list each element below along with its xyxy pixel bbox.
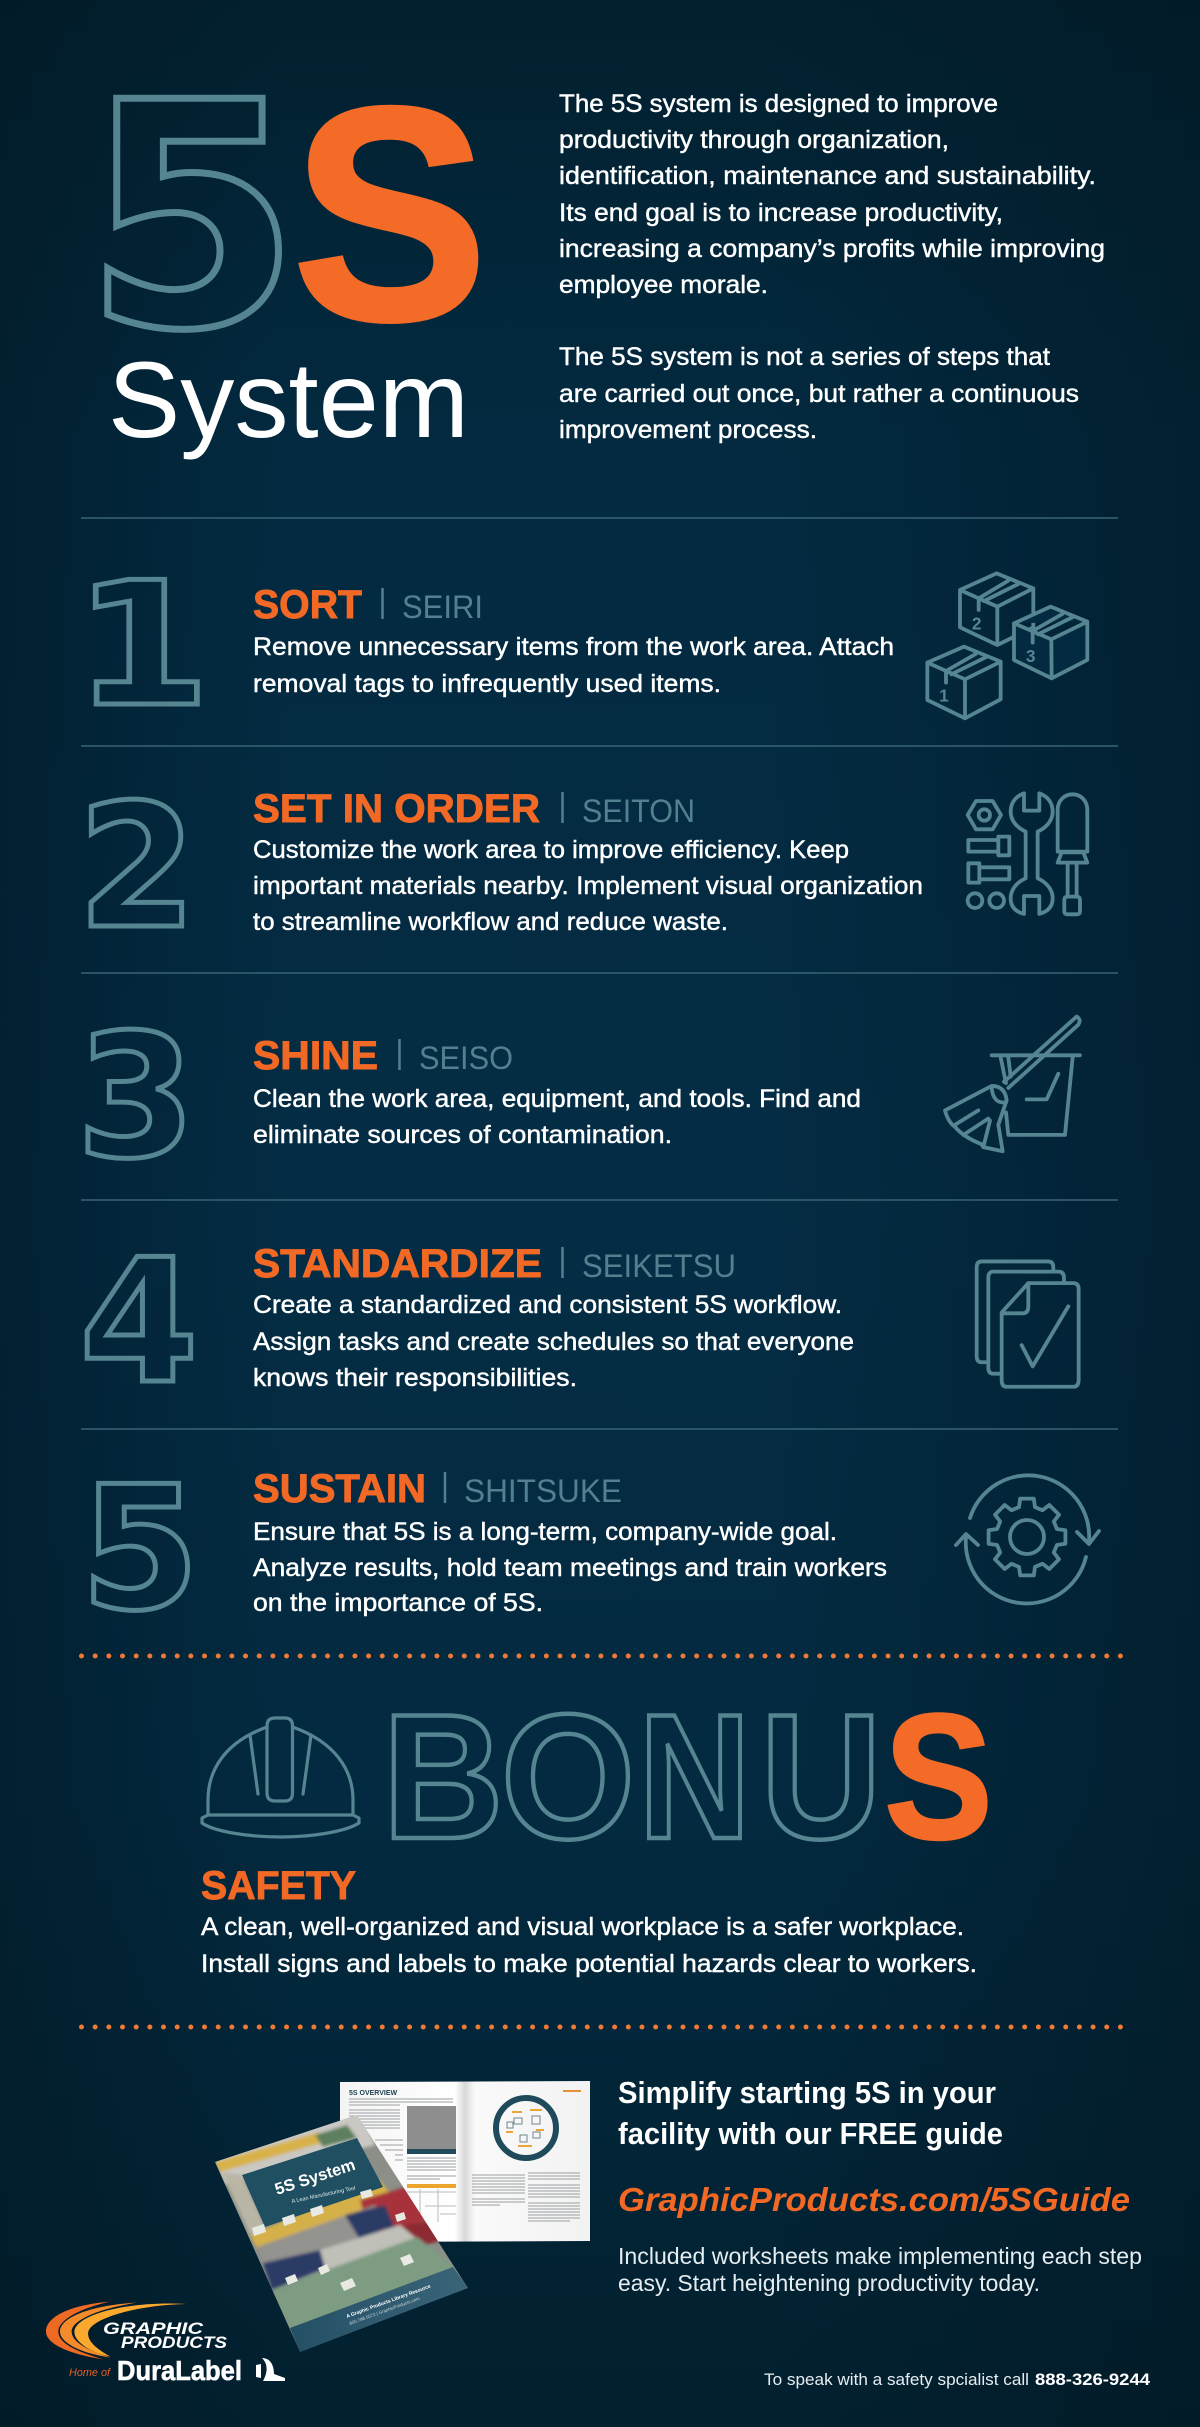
icon: broom and bucket [945,1017,1080,1151]
intro text block: Its end goal is to increase productivity, [559,199,1003,227]
outlined numeral 5: 5 [84,37,300,399]
heading: bonus: O [501,1678,635,1877]
panel: step 4 standardize [80,1223,1079,1422]
phone contact line: 888-326-9244 [1035,2371,1151,2389]
description: important materials nearby. Implement visual organization [253,872,923,900]
heading: sustain: SUSTAIN [253,1467,426,1511]
heading: shine: SEISO [419,1040,513,1076]
intro text block: are carried out once, but rather a continuous [559,380,1079,408]
icon: checklist documents [977,1261,1079,1387]
intro text block: improvement process. [559,416,817,444]
description: knows their responsibilities. [253,1364,577,1392]
numeral 1: 1 [74,546,210,745]
numeral 5: 5 [81,1450,199,1649]
logo: Graphic Products, Home of DuraLabel: DuraLabel [117,2355,242,2386]
intro text block: The 5S system is not a series of steps that [559,343,1050,371]
description [253,1085,861,1149]
guide url: GraphicProducts.com/5SGuide [618,2181,1130,2218]
numeral 2: 2 [78,768,196,967]
description: Clean the work area, equipment, and tools. Find and [253,1085,861,1113]
description: to streamline workflow and reduce waste. [253,908,728,936]
logo wordmark: GRAPHIC [103,2319,204,2338]
logo: Graphic Products, Home of DuraLabel: Home of [69,2367,111,2379]
heading: sort: SORT [253,583,362,627]
heading: bonus: B [383,1677,503,1876]
description: Remove unnecessary items from the work area. Attach [253,633,894,661]
front cover: A Lean Manufacturing Tool [291,2186,356,2205]
heading: shine: SHINE [253,1034,378,1078]
icon: numbered boxes: 1 [939,685,949,705]
front cover [210,2105,468,2352]
intro text block: employee morale. [559,271,768,299]
intro text block: The 5S system is designed to improve [559,90,998,118]
heading: sort: SEIRI [402,589,483,625]
word System: System [108,339,469,460]
heading: bonus: U [761,1677,881,1876]
heading: bonus [383,1677,993,1877]
panel: bonus safety [201,1677,993,1978]
description: A clean, well-organized and visual workplace is a safer workplace. [201,1913,964,1941]
front cover: A Graphic Products Library Resource [346,2284,432,2320]
open spread pages: 5S OVERVIEW [349,2090,398,2097]
numeral 4: 4 [80,1223,198,1422]
guide description: Included worksheets make implementing each step [618,2243,1142,2269]
heading: sustain [253,1467,622,1511]
icon: numbered boxes: 2 [972,613,981,633]
open spread pages [340,2081,590,2242]
heading: sort [253,583,483,627]
description: Customize the work area to improve efficiency. Keep [253,836,849,864]
heading: standardize: SEIKETSU [582,1248,736,1284]
description: Create a standardized and consistent 5S workflow. [253,1291,842,1319]
icon: hard hat [202,1718,359,1837]
logo: Graphic Products, Home of DuraLabel: PRODUCTS [121,2333,228,2352]
logo: Graphic Products, Home of DuraLabel [46,2302,285,2386]
numeral 3: 3 [77,998,195,1197]
heading: set in order: SEITON [582,793,695,829]
description: on the importance of 5S. [253,1589,543,1617]
guide description [618,2243,1142,2296]
description: Install signs and labels to make potential hazards clear to workers. [201,1950,977,1978]
panel: step 3 shine [77,998,1080,1197]
panel: step 2 set in order [78,768,1087,967]
title: 5S System [84,37,488,460]
call to action [618,2075,1142,2296]
description: Analyze results, hold team meetings and train workers [253,1554,887,1582]
description [253,836,923,936]
intro text block: increasing a company’s profits while improving [559,235,1105,263]
phone contact line [764,2371,1151,2389]
heading: standardize: STANDARDIZE [253,1242,542,1286]
heading: sustain: SHITSUKE [464,1473,622,1509]
description [201,1913,977,1978]
panel: step 1 sort [74,546,1087,745]
intro text block: productivity through organization, [559,126,949,154]
panel: step 5 sustain [81,1450,1099,1649]
guide brochure mockup [210,2081,590,2352]
intro text block: identification, maintenance and sustainability. [559,162,1096,190]
description [253,1291,854,1392]
orange letter S: S [292,45,488,384]
front cover: 800.788.5572 | GraphicProducts.com [349,2296,421,2326]
icon: tools [968,793,1087,914]
heading: safety: SAFETY [201,1864,356,1908]
description: Assign tasks and create schedules so that everyone [253,1328,854,1356]
heading: free guide: facility with our FREE guide [618,2116,1003,2151]
heading: free guide: Simplify starting 5S in your [618,2075,996,2110]
heading: set in order: SET IN ORDER [253,787,540,831]
heading: shine [253,1034,513,1078]
logo swooshes [46,2302,187,2359]
description: eliminate sources of contamination. [253,1121,672,1149]
icon: numbered boxes [927,573,1087,718]
heading: bonus: N [639,1678,750,1876]
front cover: 5S System [273,2156,358,2199]
icon: gear with cycle arrows [956,1475,1099,1603]
description [253,1518,887,1617]
heading: standardize [253,1242,736,1286]
DuraLabel mark [256,2358,285,2381]
description [253,633,894,698]
icon: numbered boxes: 3 [1026,646,1036,666]
description: removal tags to infrequently used items. [253,670,721,698]
heading: bonus: S [884,1678,993,1877]
heading: free guide [618,2075,1003,2151]
guide description: easy. Start heightening productivity today. [618,2270,1040,2296]
description: Ensure that 5S is a long-term, company-wide goal. [253,1518,837,1546]
intro text block [559,90,1105,444]
phone contact line: To speak with a safety spcialist call [764,2371,1029,2389]
heading: set in order [253,787,695,831]
